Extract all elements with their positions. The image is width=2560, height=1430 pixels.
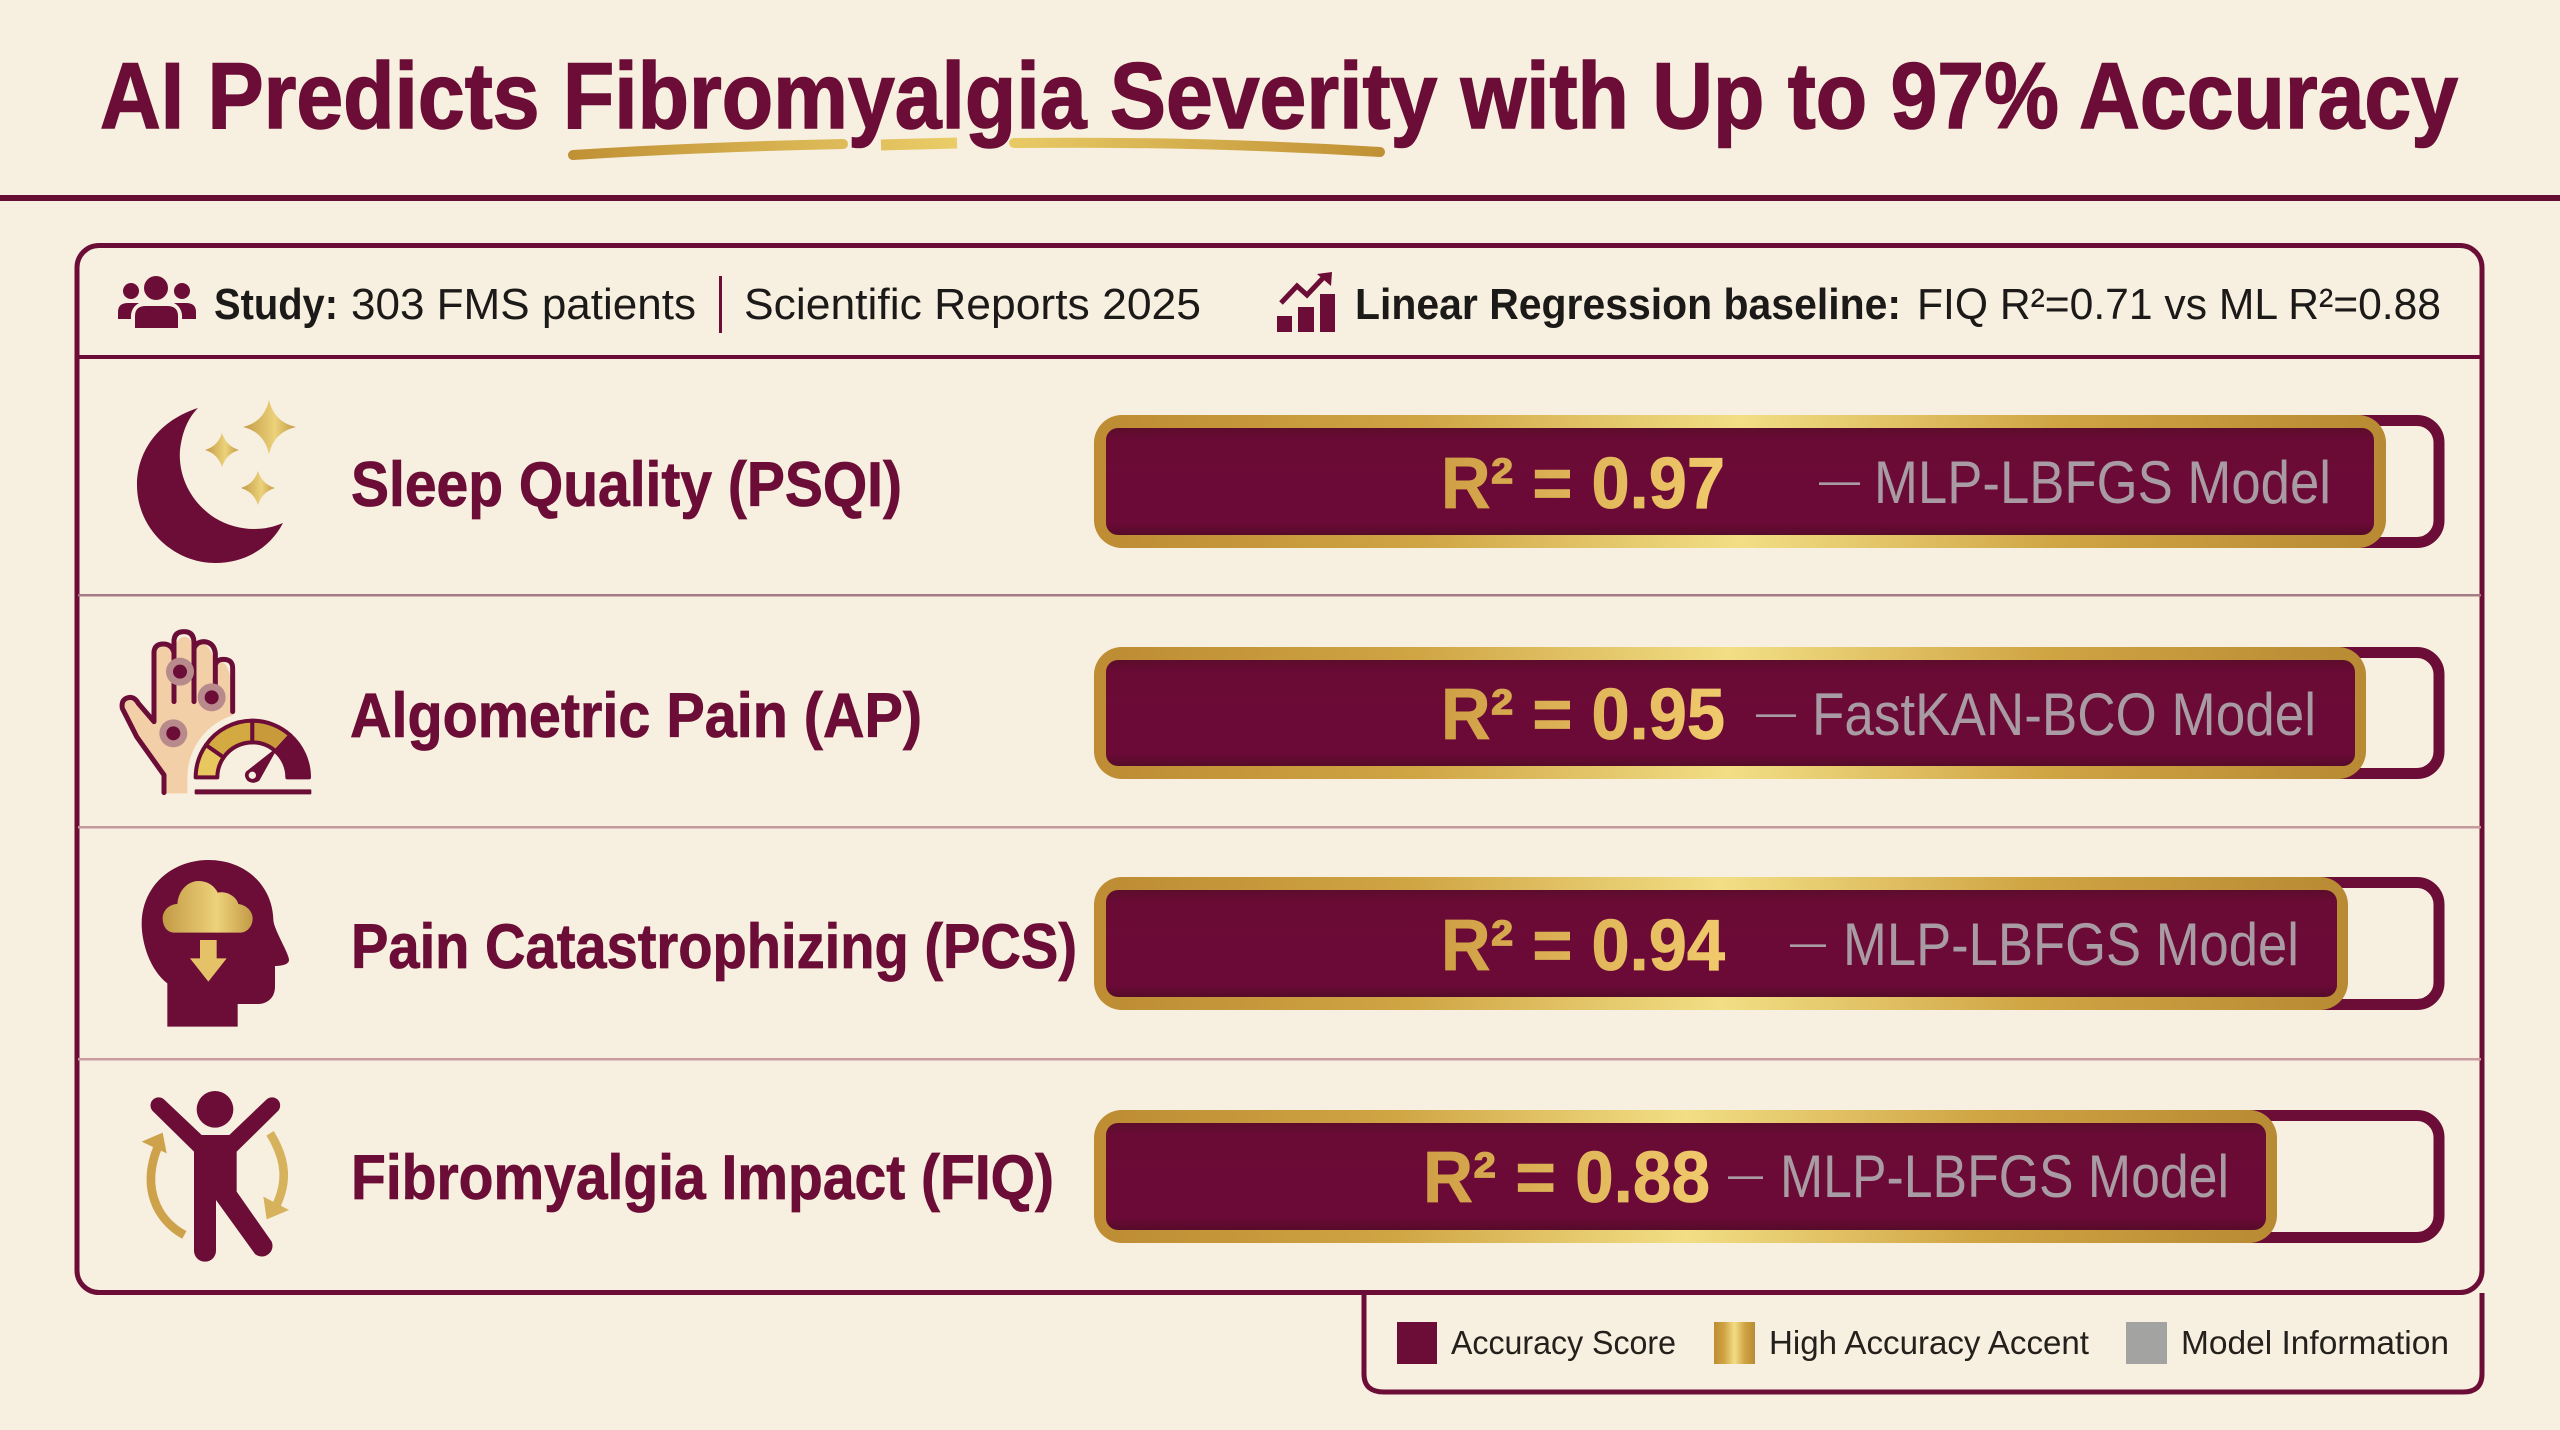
row: fibromyalgia impact <box>142 1091 2439 1262</box>
bar: sleep quality 0.97 <box>1094 415 2439 548</box>
bar: algometric pain 0.95 <box>1094 647 2439 779</box>
baseline comparison text <box>1355 280 2441 329</box>
baseline comparison text: Linear Regression baseline: <box>1355 280 1901 329</box>
study text: Scientific Reports 2025 <box>744 280 1201 329</box>
icon: moon and stars <box>137 400 296 563</box>
bar: fibromyalgia impact 0.88: R² = 0.88 <box>1423 1138 1710 1218</box>
row: pain catastrophizing <box>142 860 2439 1027</box>
icon: hand with pain gauge <box>122 632 317 797</box>
bar: algometric pain 0.95: — <box>1756 691 1796 735</box>
label: algometric pain: Algometric Pain (AP) <box>350 681 922 751</box>
study text <box>214 276 1201 333</box>
bar: pain catastrophizing 0.94: MLP-LBFGS Model <box>1843 911 2299 978</box>
row: algometric pain <box>122 632 2439 797</box>
label: pain catastrophizing: Pain Catastrophizing (PCS) <box>351 912 1077 982</box>
legend item: model information: Model Information <box>2181 1324 2449 1361</box>
title underline <box>573 143 1380 155</box>
icon: head with cloud <box>142 860 289 1027</box>
title rule <box>0 195 2560 201</box>
row: sleep quality <box>137 400 2439 563</box>
bar: pain catastrophizing 0.94: R² = 0.94 <box>1441 906 1725 986</box>
bar: pain catastrophizing 0.94: — <box>1790 921 1826 965</box>
study text: 303 FMS patients <box>351 280 696 329</box>
legend item: high accuracy accent: High Accuracy Accent <box>1769 1324 2089 1361</box>
bar: sleep quality 0.97: MLP-LBFGS Model <box>1874 449 2331 516</box>
icon: people group <box>118 276 196 328</box>
bar: algometric pain 0.95: FastKAN-BCO Model <box>1812 681 2316 748</box>
panel: main results <box>77 246 2482 1292</box>
bar: pain catastrophizing 0.94 <box>1094 877 2439 1010</box>
bar: algometric pain 0.95: R² = 0.95 <box>1441 675 1725 755</box>
bar: fibromyalgia impact 0.88: MLP-LBFGS Model <box>1780 1143 2229 1210</box>
baseline comparison text: FIQ R²=0.71 vs ML R²=0.88 <box>1917 280 2441 329</box>
bar: sleep quality 0.97: — <box>1819 459 1860 503</box>
bar: fibromyalgia impact 0.88: — <box>1728 1153 1763 1197</box>
label: sleep quality: Sleep Quality (PSQI) <box>351 450 902 520</box>
legend <box>1364 1293 2482 1392</box>
label: fibromyalgia impact: Fibromyalgia Impact (FIQ) <box>351 1143 1054 1213</box>
icon: rising chart <box>1277 272 1335 332</box>
legend item: accuracy score: Accuracy Score <box>1451 1324 1676 1361</box>
bar: fibromyalgia impact 0.88 <box>1094 1110 2439 1243</box>
panel: study header <box>118 272 2441 333</box>
bar: sleep quality 0.97: R² = 0.97 <box>1441 444 1725 524</box>
legend item: accuracy score <box>1397 1322 1676 1364</box>
icon: person with circular arrows <box>142 1091 289 1262</box>
study text: Study: <box>214 280 338 329</box>
